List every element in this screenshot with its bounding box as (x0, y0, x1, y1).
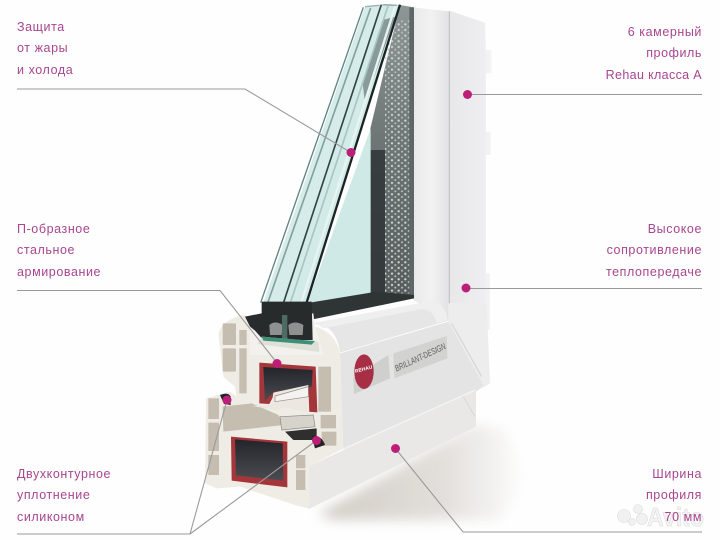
green gasket strip (257, 337, 319, 352)
section chambers (208, 323, 336, 490)
callout markers (222, 90, 472, 453)
label: profile width: 70 мм (665, 510, 702, 524)
label: steel reinforcement (17, 222, 101, 279)
label: six-chamber profile: профиль (646, 46, 702, 60)
perforated spacer (370, 5, 414, 298)
watermark: Avito (647, 502, 704, 532)
label: six-chamber profile: 6 камерный (628, 25, 702, 39)
logo plate: REHAU (354, 364, 373, 375)
label: heat transfer resistance (606, 222, 702, 279)
label: steel reinforcement: армирование (17, 265, 101, 279)
lower front face (340, 322, 483, 450)
label: heat and cold protection (17, 20, 73, 77)
label: double seal: силиконом (17, 510, 85, 524)
section base (205, 315, 343, 508)
upper steel reinforcement (259, 363, 317, 412)
seals (220, 394, 231, 405)
bottom glazing seal (307, 292, 414, 321)
floor shadow (318, 424, 525, 520)
lower steel reinforcement (231, 437, 287, 487)
glass unit and frame upright (261, 5, 492, 330)
label: heat transfer resistance: сопротивление (607, 243, 702, 257)
glass panes (261, 5, 400, 307)
view through glass (308, 128, 371, 303)
label: profile width: профиля (646, 488, 702, 502)
gasket block (280, 415, 315, 430)
label: six-chamber profile (606, 25, 702, 82)
brand label (393, 336, 448, 378)
label: heat and cold protection: Защита (17, 20, 65, 34)
label: heat transfer resistance: теплопередаче (606, 265, 702, 279)
sash upright (413, 7, 449, 320)
label: double seal: уплотнение (17, 488, 90, 502)
logo plate (353, 354, 390, 394)
label: heat and cold protection: от жары (17, 41, 68, 55)
frame corner (448, 303, 490, 392)
label: steel reinforcement: П-образное (17, 222, 90, 236)
glass rebate (245, 313, 323, 355)
label: heat and cold protection: и холода (17, 63, 73, 77)
brand label: BRILLANT-DESIGN (393, 341, 448, 373)
label: profile width (646, 467, 702, 524)
label: double seal: Двухконтурное (17, 467, 111, 481)
frame upright (449, 11, 492, 330)
label: six-chamber profile: Rehau класса А (606, 68, 702, 82)
watermark (618, 502, 704, 532)
label: double seal (17, 467, 111, 524)
leader lines (17, 89, 702, 534)
sill moulding (313, 301, 448, 353)
profile cross-section and sill (205, 301, 490, 509)
label: heat transfer resistance: Высокое (648, 222, 702, 236)
label: steel reinforcement: стальное (17, 243, 75, 257)
label: profile width: Ширина (652, 467, 702, 481)
